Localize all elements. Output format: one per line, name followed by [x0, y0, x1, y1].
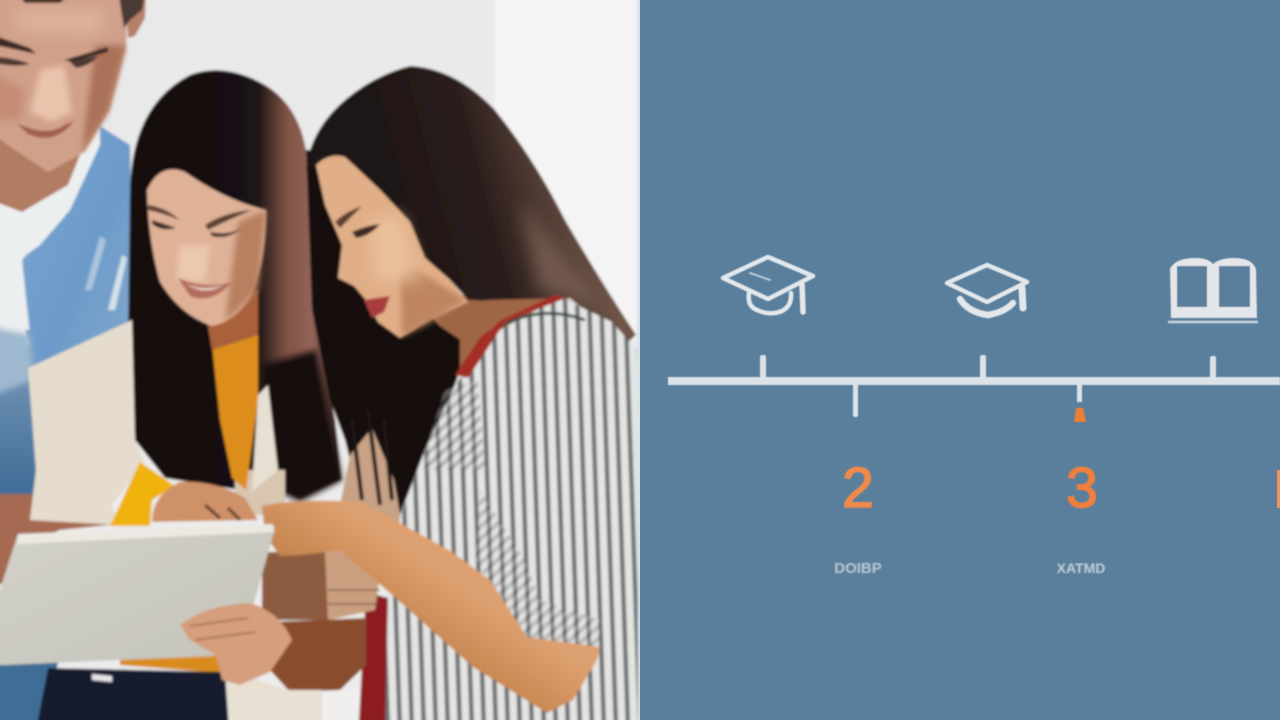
loose hair strands: [352, 410, 392, 505]
red strap: [358, 592, 388, 720]
face: [0, 0, 128, 172]
cream cardigan left: [28, 320, 145, 525]
red collar strap: [455, 295, 566, 378]
eyes and brows: [148, 205, 180, 220]
long hair: [306, 66, 636, 345]
yellow-orange top: [212, 335, 258, 490]
middle woman's hand on tablet: [152, 482, 258, 522]
arm of the right woman: [262, 501, 600, 713]
ear and hair: [125, 0, 146, 38]
yellow sleeve: [110, 462, 175, 526]
lower forearm: [270, 618, 366, 692]
face: [147, 169, 266, 326]
photo background: white curtains: [0, 0, 670, 720]
orange marker: [1074, 408, 1086, 422]
dark backing of the neck: [460, 295, 575, 375]
eyebrows and eyes: [0, 34, 36, 54]
blue overshirt: [22, 126, 134, 390]
woman in the middle: [28, 70, 342, 526]
label under 3: XATMD: [1057, 560, 1105, 576]
hair underside dark: [306, 150, 480, 515]
panel: photo of three students with a tablet: [0, 0, 670, 720]
mouth: [17, 121, 74, 138]
tablet: [0, 524, 275, 665]
neck: [0, 137, 81, 213]
number 4, cropped at the edge: [1277, 470, 1280, 508]
man in blue shirt: [0, 0, 146, 720]
hand under tablet: [180, 603, 292, 685]
number 2: 2: [842, 456, 874, 520]
icon: graduation cap 1: [723, 257, 813, 313]
man's hand: [0, 492, 110, 586]
woman on the right: [306, 66, 638, 720]
skin and cardigan behind the strands: [340, 428, 402, 525]
lower blue shirt: [0, 328, 38, 496]
smile: [178, 278, 232, 299]
eyes and brows: [335, 206, 362, 228]
icon: open book: [1168, 258, 1258, 322]
label under 2: DOIBP: [834, 560, 882, 577]
shoulder seam: [501, 310, 587, 328]
lips: [364, 296, 390, 318]
white tee: [0, 126, 100, 350]
lower cream cardigan: [225, 678, 323, 720]
hands, tablet and arms: [0, 482, 600, 720]
panel: blue timeline background: [641, 0, 1280, 720]
brown torso behind the tablet: [262, 552, 330, 620]
number 3: 3: [1066, 456, 1098, 520]
timeline axis with tick marks: [668, 355, 1280, 422]
orange hem and jeans: [120, 655, 222, 673]
icon: graduation cap 2: [947, 265, 1027, 315]
folded sleeve: [425, 380, 485, 470]
hair: [128, 70, 342, 500]
striped shirt: [384, 297, 638, 720]
neck: [205, 290, 258, 350]
face and neck: [432, 298, 500, 341]
